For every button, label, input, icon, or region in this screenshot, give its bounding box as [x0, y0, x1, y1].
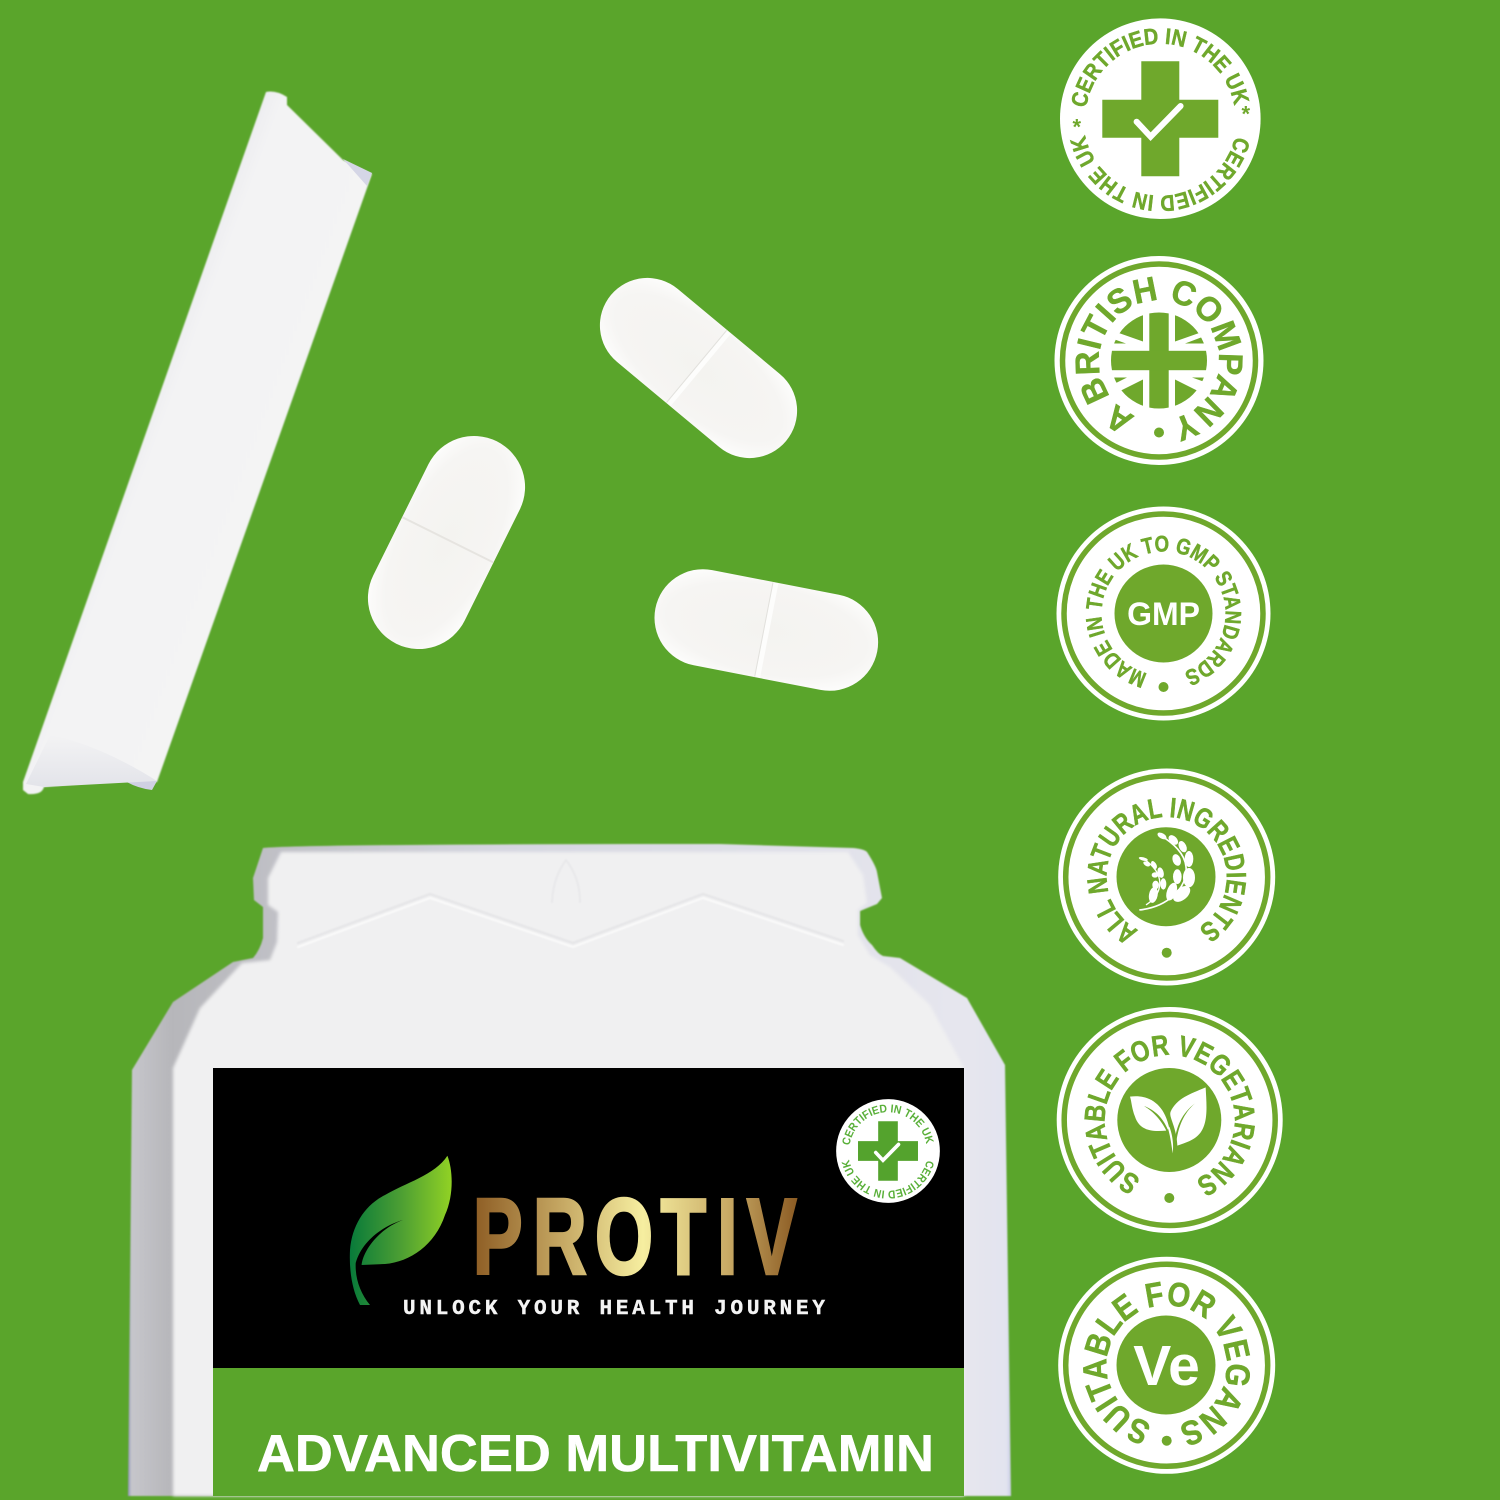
icon: wheat sprigs [1138, 831, 1195, 910]
dot [1158, 682, 1168, 692]
badge: suitable for vegans [1058, 1256, 1276, 1474]
small certified badge: CERTIFIED IN THE UK [842, 1160, 934, 1198]
neck emboss [268, 860, 870, 962]
cross with check [1102, 61, 1218, 176]
star right: * [1242, 102, 1251, 127]
badge: suitable for vegetarians [1056, 1007, 1283, 1233]
icon: sprout leaves [1130, 1087, 1207, 1153]
pill: left [351, 419, 542, 666]
dot [1164, 1193, 1174, 1203]
bottle lid [23, 92, 372, 794]
dot [1162, 948, 1172, 958]
green label [213, 1368, 964, 1496]
badge: a British company [1054, 256, 1264, 465]
union flag icon [1109, 310, 1209, 410]
ring text: SUITABLE FOR VEGETARIANS [1084, 1035, 1255, 1196]
badge: GMP [1056, 506, 1270, 720]
Ve label: Ve [1133, 1334, 1200, 1398]
ring text: ALL NATURAL INGREDIENTS [1087, 798, 1246, 943]
pill: top [581, 259, 816, 477]
black label [213, 1068, 964, 1368]
dot [1162, 1436, 1172, 1446]
ring text top: CERTIFIED IN THE UK [1072, 28, 1250, 106]
star left: * [1073, 115, 1082, 140]
ring text bottom: CERTIFIED IN THE UK [1070, 134, 1249, 212]
bottle silhouette [128, 844, 1011, 1496]
logo leaf [350, 1156, 452, 1305]
ring text: MADE IN THE UK TO GMP STANDARDS [1086, 536, 1242, 688]
logo wordmark: PROTIV [473, 1175, 797, 1297]
dot [1154, 428, 1164, 438]
bottle [127, 843, 1012, 1498]
ring text: SUITABLE FOR VEGANS [1083, 1282, 1250, 1445]
GMP disc [1114, 564, 1212, 662]
badge: certified in the UK [1060, 18, 1261, 219]
pill: right [646, 561, 886, 699]
small certified badge: CERTIFIED IN THE UK [842, 1104, 934, 1144]
small certified badge [836, 1099, 940, 1203]
product name: ADVANCED MULTIVITAMIN [257, 1424, 934, 1482]
GMP label: GMP [1127, 596, 1200, 632]
ring text: A BRITISH COMPANY [1075, 276, 1243, 442]
bottle face [173, 852, 964, 1496]
badge: all natural ingredients [1058, 768, 1276, 986]
logo tagline: UNLOCK YOUR HEALTH JOURNEY [403, 1298, 825, 1321]
